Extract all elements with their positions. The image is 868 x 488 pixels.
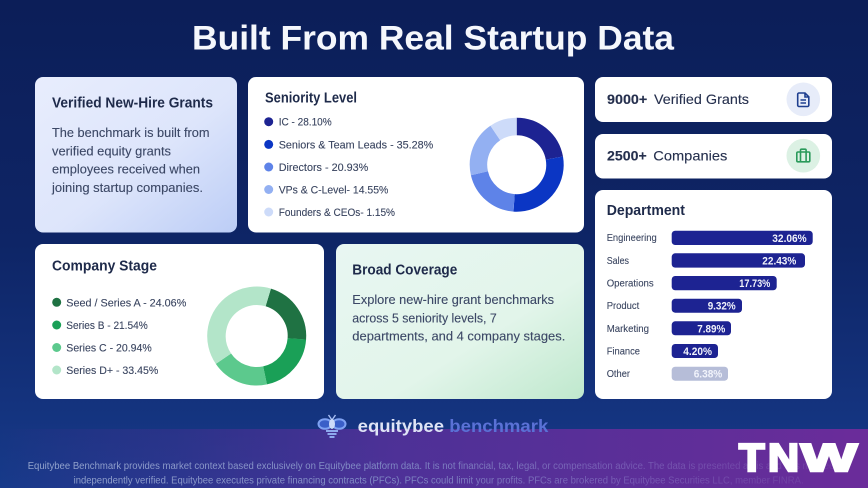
legend: Seniors & Team Leads - 35.28% xyxy=(279,139,433,151)
stat value: 2500+ xyxy=(607,148,647,164)
logo: TNW xyxy=(739,437,857,480)
bar chart: 4.20% xyxy=(683,346,712,358)
bar chart: Other xyxy=(607,369,630,380)
stat label: Companies xyxy=(653,148,727,164)
title: Built From Real Startup Data xyxy=(192,20,675,58)
bar chart: 7.89% xyxy=(697,323,725,335)
bar chart: 22.43% xyxy=(762,255,796,267)
logo: TNW: T xyxy=(739,437,765,480)
legend: Series B - 21.54% xyxy=(66,320,148,332)
logo: TNW: N xyxy=(768,437,799,480)
text block: The benchmark is built from xyxy=(52,125,210,140)
panel: broad coverage xyxy=(336,244,584,399)
disclaimer xyxy=(28,461,840,486)
stat label: Verified Grants xyxy=(654,91,749,107)
purple band xyxy=(0,429,868,488)
bar chart: Operations xyxy=(607,278,654,290)
bar chart xyxy=(607,231,813,381)
text block: joining startup companies. xyxy=(51,180,203,195)
logo: TNW: W xyxy=(801,437,857,480)
bar chart: 17.73% xyxy=(739,278,770,290)
text block: Explore new-hire grant benchmarks xyxy=(352,292,554,307)
disclaimer: Equitybee Benchmark provides market context based exclusively on Equitybee platform data. It is not financial, tax, legal, or compensation advice. The data is presented as-is and has not been xyxy=(28,461,840,472)
bar chart: Engineering xyxy=(607,233,657,244)
legend: Founders & CEOs- 1.15% xyxy=(279,207,395,219)
bar chart: Marketing xyxy=(607,324,649,335)
heading: Seniority Level xyxy=(265,90,357,106)
disclaimer: independently verified. Equitybee executes private financing contracts (PFCs). PFCs could limit your profits. PFCs are brokered by Equitybee Securities LLC, member FINRA. xyxy=(74,475,804,486)
logo: equitybee benchmark xyxy=(318,415,549,437)
bar chart: Product xyxy=(607,301,639,312)
bar chart: Sales xyxy=(607,256,629,267)
stat card: companies xyxy=(595,134,832,178)
text block xyxy=(51,125,210,195)
text block: employees received when xyxy=(52,162,200,176)
icon: briefcase xyxy=(786,139,820,172)
donut chart: company stage xyxy=(201,280,313,392)
donut chart: seniority xyxy=(464,112,570,218)
panel: department xyxy=(595,190,832,399)
legend: IC - 28.10% xyxy=(279,117,332,129)
icon: bee xyxy=(318,415,346,437)
legend: VPs & C-Level- 14.55% xyxy=(279,184,388,196)
wordmark: equitybee xyxy=(358,416,444,436)
text block: departments, and 4 company stages. xyxy=(352,329,565,344)
legend: Seed / Series A - 24.06% xyxy=(66,297,186,309)
heading: Broad Coverage xyxy=(352,262,457,278)
text block xyxy=(352,292,565,344)
bar chart: 32.06% xyxy=(772,233,807,245)
legend xyxy=(52,297,186,377)
panel: verified new-hire grants xyxy=(35,77,237,232)
heading: Company Stage xyxy=(52,259,157,275)
text block: verified equity grants xyxy=(52,144,171,158)
logo: equitybee benchmark: benchmark xyxy=(449,416,549,436)
heading: Verified New-Hire Grants xyxy=(52,96,213,112)
stat value: 9000+ xyxy=(607,91,647,107)
legend xyxy=(264,117,433,219)
bar chart: 9.32% xyxy=(708,301,736,313)
panel: seniority level xyxy=(248,77,584,232)
stat card: verified grants xyxy=(595,77,832,122)
legend: Directors - 20.93% xyxy=(279,162,368,174)
text block: across 5 seniority levels, 7 xyxy=(352,310,497,325)
legend: Series D+ - 33.45% xyxy=(66,365,158,377)
bar chart: Finance xyxy=(607,346,640,357)
heading: Department xyxy=(607,203,685,219)
legend: Series C - 20.94% xyxy=(66,342,152,354)
panel: company stage xyxy=(35,244,324,399)
bar chart: 6.38% xyxy=(694,369,722,381)
icon: document xyxy=(786,82,820,116)
